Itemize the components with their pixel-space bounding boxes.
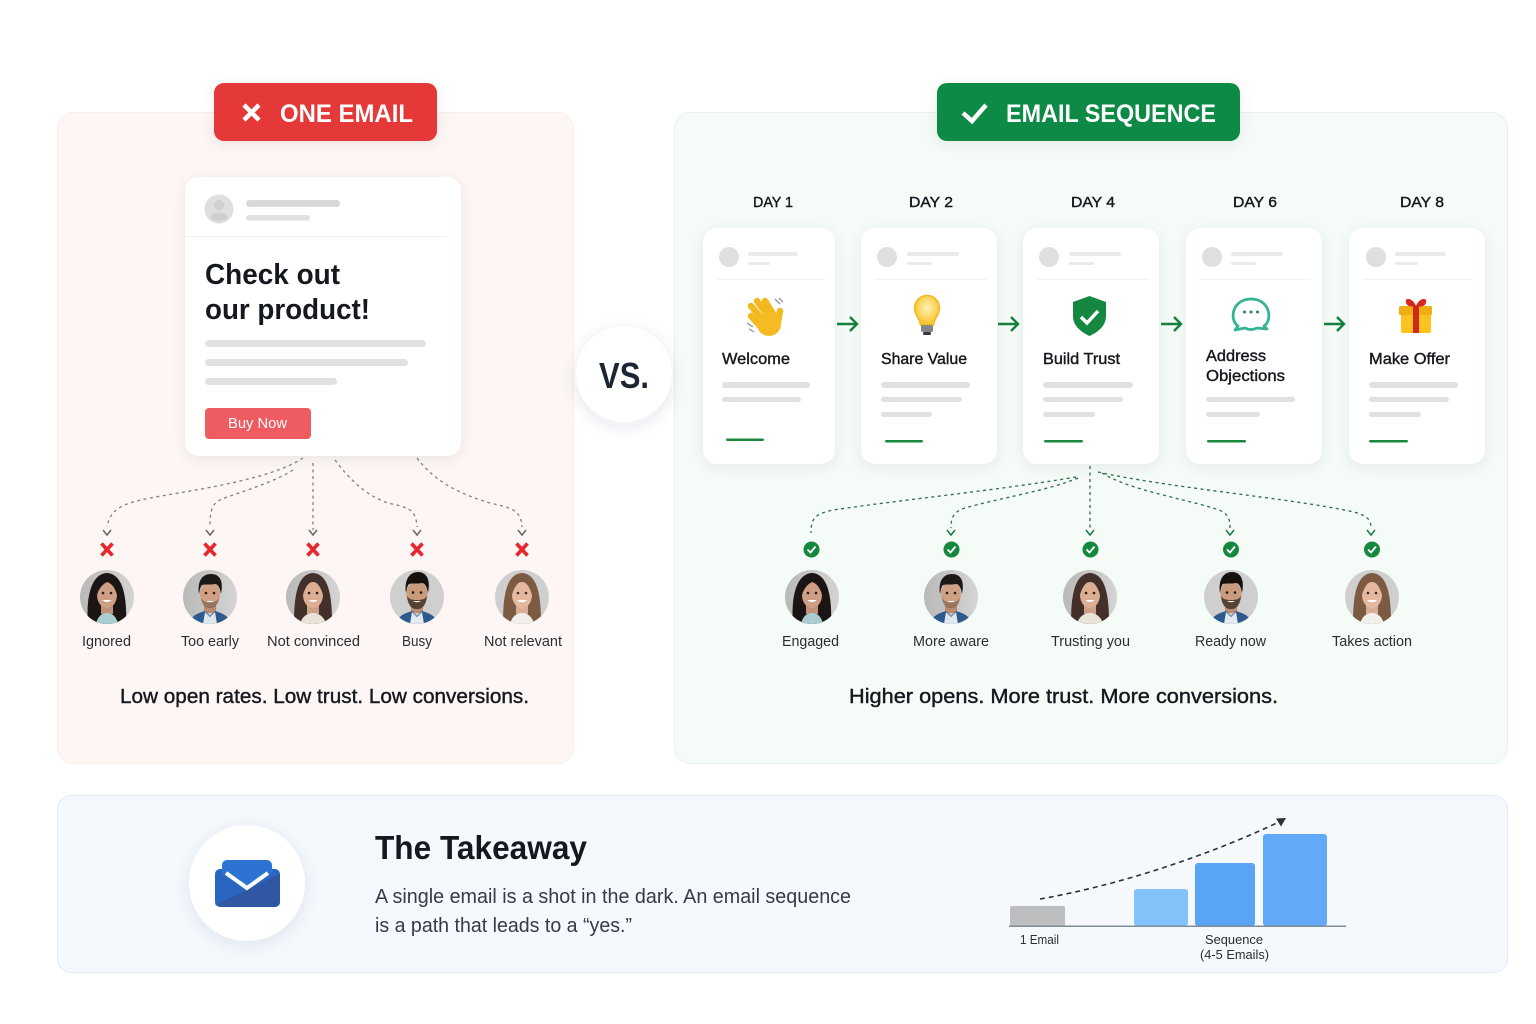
takeaway text: [375, 885, 851, 937]
takeaway text: is a path that leads to a “yes.”: [375, 914, 632, 937]
buy now button: Buy Now: [228, 416, 288, 432]
card: address objections: Objections: [1206, 368, 1285, 385]
right summary: Higher opens. More trust. More conversions.: [849, 686, 1278, 708]
email headline: our product!: [205, 294, 370, 326]
recipient: not relevant: [484, 544, 562, 650]
connectors: sequence to recipients: [811, 466, 1375, 535]
recipient: not relevant: Not relevant: [484, 634, 562, 650]
recipient: engaged: [782, 542, 839, 650]
icon: speech bubble: [1233, 299, 1269, 330]
recipient: not convinced: [267, 544, 360, 650]
panel: takeaway: [58, 796, 1508, 972]
recipient: takes action: [1332, 542, 1412, 650]
recipient: ignored: Ignored: [82, 634, 131, 650]
badge: email sequence: EMAIL SEQUENCE: [1006, 100, 1216, 128]
growth bar chart: 1 Email: [1020, 933, 1059, 947]
recipient: more aware: More aware: [913, 634, 989, 650]
arrow: [1324, 317, 1344, 331]
badge: one email: ONE EMAIL: [280, 100, 413, 128]
recipient: too early: [181, 544, 240, 650]
left summary: Low open rates. Low trust. Low conversions.: [120, 686, 529, 708]
vs badge: [576, 326, 672, 422]
card: build trust: [1023, 228, 1159, 464]
recipient: engaged: Engaged: [782, 634, 839, 650]
vs badge: VS.: [599, 355, 649, 396]
email card: [185, 177, 461, 456]
takeaway text: A single email is a shot in the dark. An email sequence: [375, 885, 851, 908]
icon: gift: [1399, 299, 1432, 333]
growth bar chart: [1009, 818, 1346, 962]
growth bar chart: Sequence: [1205, 933, 1263, 947]
card: make offer: Make Offer: [1369, 351, 1451, 368]
growth trend arrow: [1040, 818, 1286, 899]
recipient: more aware: [913, 542, 989, 650]
icon: light bulb: [914, 296, 940, 335]
email headline: Check out: [205, 259, 340, 291]
badge: one email: [214, 83, 437, 141]
card: share value: [861, 228, 997, 464]
recipient: not convinced: Not convinced: [267, 634, 360, 650]
recipient: busy: Busy: [402, 634, 433, 650]
recipient: ready now: Ready now: [1195, 634, 1267, 650]
icon: envelope: [189, 825, 305, 941]
arrow: [998, 317, 1018, 331]
recipient: busy: [390, 544, 444, 650]
panel: one email: [58, 83, 574, 764]
card: address objections: Address: [1206, 348, 1266, 365]
connectors: email to recipients: [103, 458, 526, 535]
card: welcome: [703, 228, 835, 464]
icon: shield: [1073, 296, 1106, 336]
panel: email sequence: [674, 83, 1508, 764]
recipient: trusting you: Trusting you: [1051, 634, 1130, 650]
recipient: trusting you: [1051, 542, 1130, 650]
card: make offer: [1349, 228, 1485, 464]
card: build trust: Build Trust: [1043, 351, 1121, 368]
day labels: DAY 4: [1071, 194, 1115, 211]
recipient: ready now: [1195, 542, 1267, 650]
recipient: ignored: [80, 544, 134, 650]
recipient: too early: Too early: [181, 634, 240, 650]
card: welcome: Welcome: [722, 351, 790, 368]
day labels: DAY 1: [753, 194, 793, 211]
icon: waving hand: [747, 298, 783, 336]
buy now button: [205, 408, 311, 439]
day labels: [753, 194, 1444, 211]
takeaway heading: The Takeaway: [375, 829, 588, 866]
recipient: takes action: Takes action: [1332, 634, 1412, 650]
arrow: [1161, 317, 1181, 331]
day labels: DAY 2: [909, 194, 953, 211]
day labels: DAY 6: [1233, 194, 1277, 211]
arrow: [837, 317, 857, 331]
email headline: [205, 259, 370, 326]
growth bar chart: (4-5 Emails): [1200, 948, 1269, 962]
card: address objections: [1186, 228, 1322, 464]
card: share value: Share Value: [881, 351, 967, 368]
badge: email sequence: [937, 83, 1240, 141]
day labels: DAY 8: [1400, 194, 1444, 211]
